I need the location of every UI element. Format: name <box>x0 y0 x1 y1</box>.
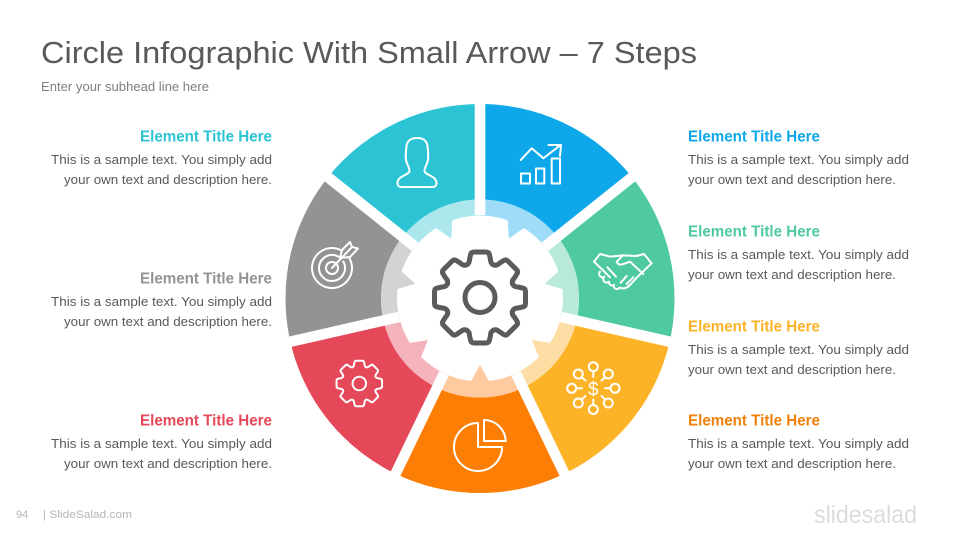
text block: grey: Element Title Here <box>140 270 272 288</box>
text block: green <box>688 224 909 282</box>
text block: blue <box>688 128 909 187</box>
segment: orange <box>395 298 565 494</box>
segment: red <box>290 298 480 474</box>
icon: money network <box>567 362 620 414</box>
footer: page number and site: 94 <box>16 509 28 521</box>
text block: yellow: your own text and description here. <box>688 363 896 377</box>
text block: red: Element Title Here <box>140 412 272 430</box>
subhead: Enter your subhead line here <box>41 80 209 94</box>
footer: logo: slidesalad <box>814 501 917 529</box>
text block: green: Element Title Here <box>688 224 820 240</box>
text block: teal: Element Title Here <box>140 128 272 146</box>
text block: orange <box>688 412 909 471</box>
circle diagram <box>280 95 680 496</box>
icon: target <box>312 242 358 288</box>
text block: teal: your own text and description here. <box>64 173 272 187</box>
text block: grey: your own text and description here. <box>64 315 272 329</box>
segment: blue <box>480 104 632 298</box>
small arrows <box>395 217 565 384</box>
text block: red: This is a sample text. You simply add <box>51 437 272 451</box>
segment: yellow <box>480 298 670 474</box>
text block: blue: your own text and description here. <box>688 173 896 187</box>
text block: red <box>51 412 272 471</box>
text block: yellow <box>688 318 909 377</box>
text block: orange: This is a sample text. You simply add <box>688 437 909 451</box>
segment: teal <box>328 104 480 298</box>
text block: grey: This is a sample text. You simply add <box>51 295 272 309</box>
text block: green: your own text and description here. <box>688 268 896 282</box>
text block: blue: Element Title Here <box>688 128 820 146</box>
text block: teal <box>51 128 272 187</box>
center disc <box>397 216 563 382</box>
text block: yellow: This is a sample text. You simply add <box>688 343 909 357</box>
footer: page number and site: | SlideSalad.com <box>43 509 132 521</box>
text block: orange: your own text and description here. <box>688 457 896 471</box>
icon: person <box>398 138 436 187</box>
text block: grey <box>51 270 272 329</box>
text block: green: This is a sample text. You simply add <box>688 248 909 262</box>
text block: yellow: Element Title Here <box>688 318 820 336</box>
icon: bar chart with arrow <box>521 145 561 184</box>
icon: money network: $ <box>588 380 599 400</box>
segment: green <box>480 177 675 342</box>
icon: red gear <box>337 361 382 406</box>
text block: red: your own text and description here. <box>64 457 272 471</box>
icon: pie chart <box>454 420 506 471</box>
icon: handshake <box>594 254 652 289</box>
icon: center gear <box>434 252 526 343</box>
text block: blue: This is a sample text. You simply add <box>688 153 909 167</box>
text block: orange: Element Title Here <box>688 412 820 430</box>
title: Circle Infographic With Small Arrow – 7 Steps <box>41 35 697 70</box>
segment: grey <box>285 177 480 342</box>
text block: teal: This is a sample text. You simply add <box>51 153 272 167</box>
